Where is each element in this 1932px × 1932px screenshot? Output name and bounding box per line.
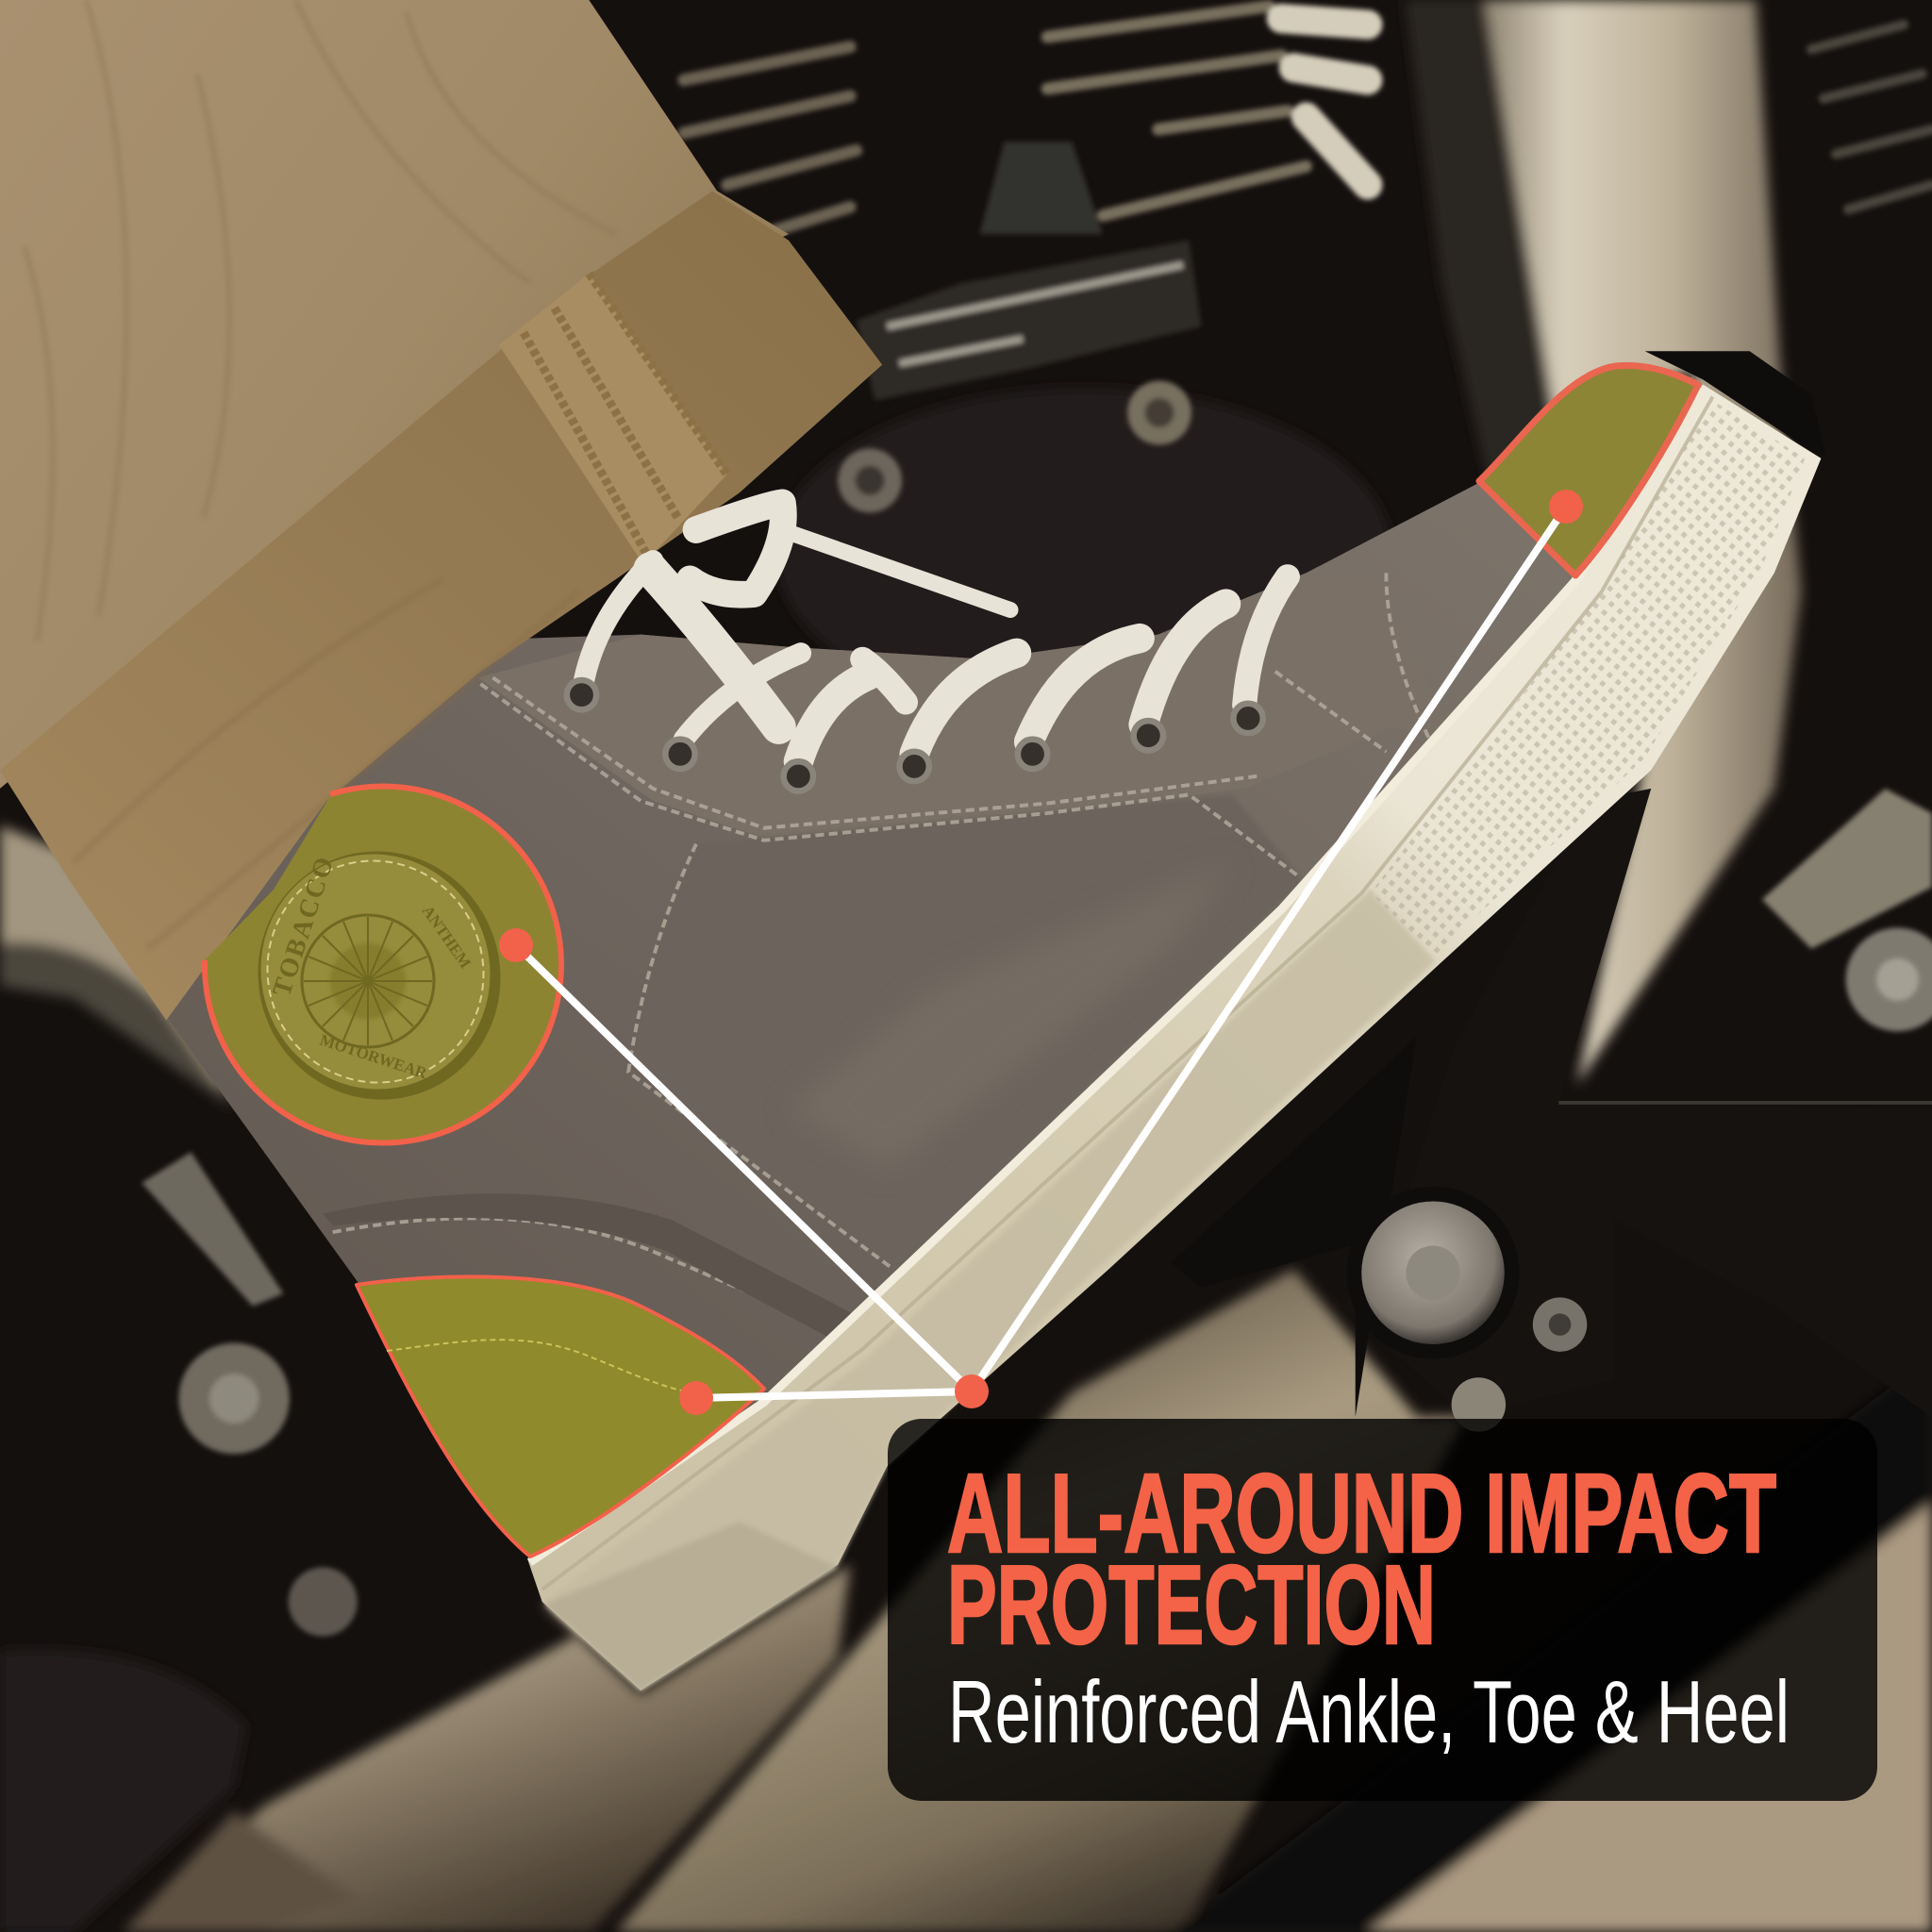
logo wordmarks: ANTHEM xyxy=(419,902,475,972)
shoe stitching xyxy=(333,573,1436,1331)
marker: toe xyxy=(1549,490,1583,524)
trouser cuff xyxy=(0,191,882,1020)
shoe upper xyxy=(166,375,1694,1558)
engine bolts xyxy=(838,381,1191,512)
cuff hem with stitching xyxy=(499,274,727,564)
shoe laces xyxy=(584,503,1288,761)
marker: ankle xyxy=(499,928,533,962)
logo wordmarks: MOTORWEAR xyxy=(318,1031,430,1083)
engine fins xyxy=(684,7,1932,234)
heading: PROTECTION xyxy=(947,1542,1436,1668)
highlight: heel reinforcement xyxy=(357,1276,764,1557)
shoe eyelets xyxy=(567,680,1263,791)
foot peg bracket xyxy=(1171,789,1932,1432)
highlight: toe reinforcement xyxy=(1479,365,1698,575)
black pedal tip xyxy=(1645,351,1826,456)
trouser leg xyxy=(0,0,882,1020)
shoe sole xyxy=(527,385,1821,1690)
logo wordmarks xyxy=(267,852,475,1083)
logo wordmarks: TOBACCO xyxy=(267,852,341,1000)
callout panel xyxy=(888,1419,1877,1801)
highlight: ankle reinforcement xyxy=(205,787,561,1145)
marker: heel xyxy=(679,1381,713,1415)
callout connector lines xyxy=(516,507,1566,1398)
heading xyxy=(947,1451,1776,1668)
toe cap texture xyxy=(1370,400,1805,955)
engine parts xyxy=(142,142,1932,1637)
marker: connector junction xyxy=(955,1374,989,1408)
ankle logo patch xyxy=(224,817,535,1134)
leather side panel xyxy=(628,794,1304,1269)
